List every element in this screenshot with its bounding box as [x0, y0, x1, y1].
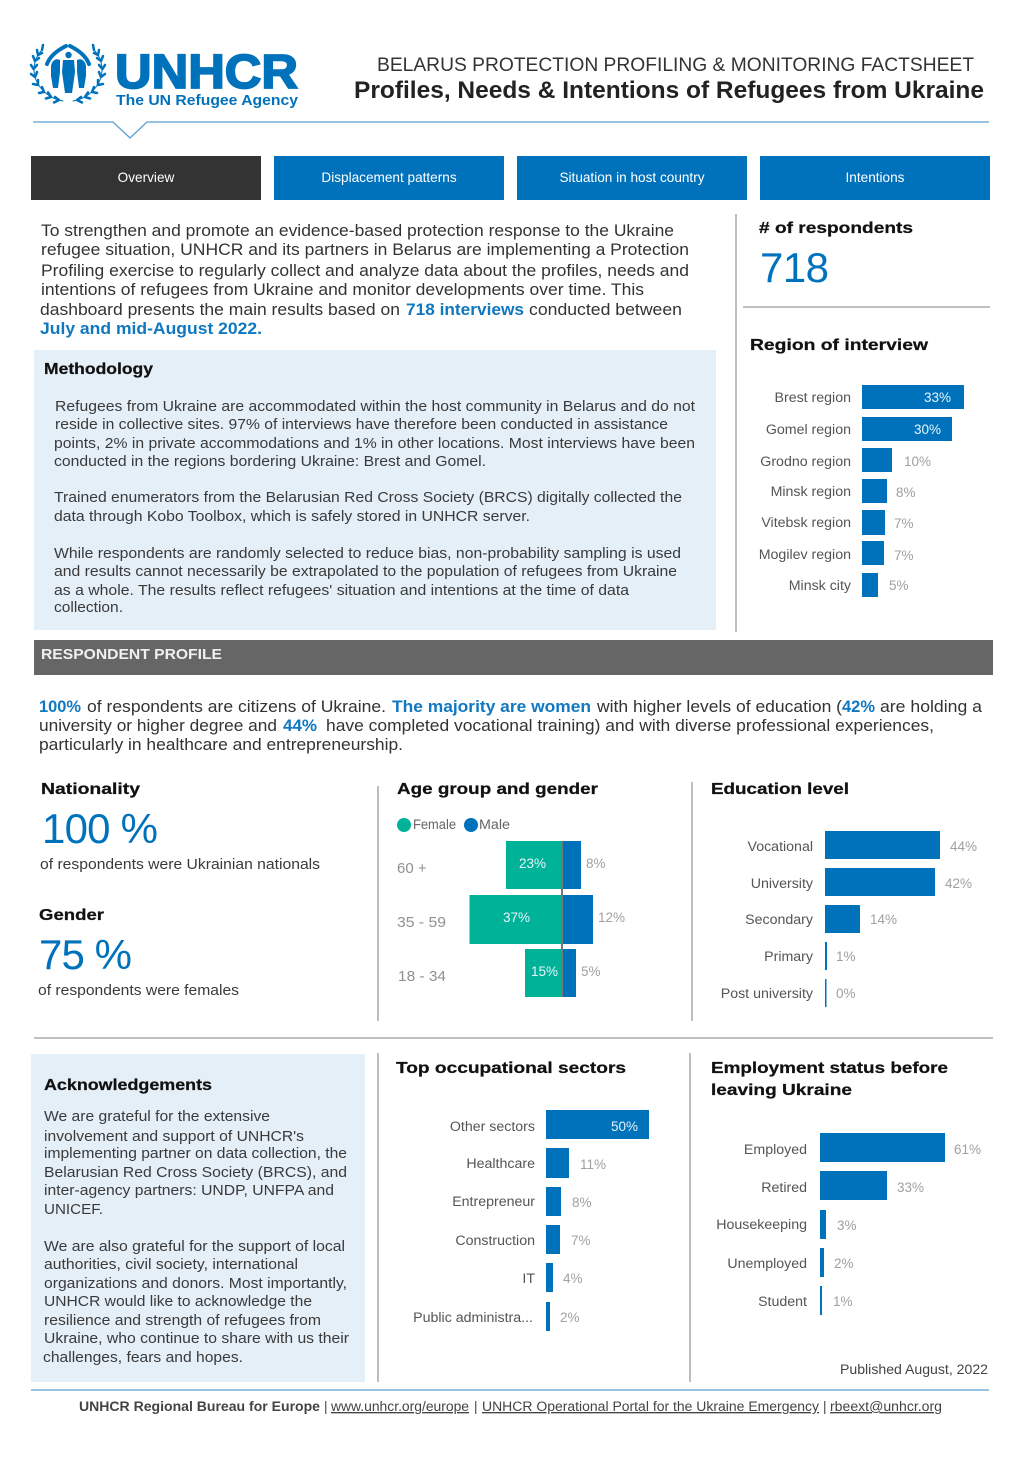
bar: Entrepreneur: Entrepreneur [452, 1194, 535, 1210]
bar: Vocational [748, 831, 977, 859]
icon: UNHCR wreath and sheltering hands [31, 45, 105, 102]
bar: Primary: Primary [764, 949, 814, 965]
row: 35 - 59: 37% [503, 910, 530, 925]
bar chart: employment status: leaving Ukraine [711, 1082, 852, 1099]
header: UNHCR logo [31, 45, 298, 109]
intro text block: intentions of refugees from Ukraine and monitor developments over time. This [41, 281, 644, 299]
bar: Minsk region [771, 479, 916, 503]
footer links: rbeext@unhcr.org [830, 1399, 942, 1414]
bar: Unemployed: 2% [834, 1256, 854, 1271]
intro text block: July and mid-August 2022. [40, 320, 262, 338]
acknowledgements text: organizations and donors. Most importantly, [44, 1275, 347, 1292]
bar: Other sectors: 50% [611, 1119, 638, 1134]
respondent profile summary text: The majority are women [392, 698, 591, 716]
stat: gender: 75 % [39, 931, 132, 978]
bar chart: employment status [711, 1060, 981, 1315]
acknowledgements text: We are grateful for the extensive [44, 1108, 270, 1125]
bar: IT: IT [522, 1271, 535, 1287]
bar: Brest region: Brest region [774, 390, 851, 406]
methodology text: and results cannot necessarily be extrapolated to the population of refugees from Ukraine [54, 563, 677, 580]
logo tagline: The UN Refugee Agency [116, 93, 298, 109]
stat: nationality [40, 781, 320, 873]
bar: University [751, 868, 972, 896]
bar: Employed [744, 1133, 981, 1162]
bar: Grodno region: Grodno region [760, 454, 851, 470]
bar: Grodno region: 10% [904, 454, 931, 469]
footer links: | [823, 1399, 827, 1414]
row: 60 + [397, 841, 606, 889]
tab: Overview [31, 156, 261, 200]
row: 18 - 34: 5% [581, 964, 601, 979]
bar: Other sectors: Other sectors [450, 1119, 535, 1135]
methodology text: While respondents are randomly selected to reduce bias, non-probability sampling is used [54, 545, 681, 562]
panel: acknowledgements [31, 1054, 365, 1382]
bar: Post university: 0% [836, 986, 856, 1001]
bar chart: education level [711, 781, 977, 1007]
tab: Displacement patterns: Displacement patterns [321, 170, 457, 185]
bar chart: education level: Education level [711, 781, 849, 798]
bar: Retired: 33% [897, 1180, 924, 1195]
footer links: | [324, 1399, 328, 1414]
row: 18 - 34 [398, 949, 601, 997]
acknowledgements text: Ukraine, who continue to share with us their [44, 1330, 349, 1347]
legend [397, 817, 510, 832]
methodology text [54, 398, 696, 616]
intro text block: Profiling exercise to regularly collect and analyze data about the profiles, needs and [41, 262, 689, 280]
bar: Primary [764, 942, 856, 970]
header rule with chevron [33, 122, 989, 138]
bar: Entrepreneur [452, 1187, 592, 1216]
navigation tabs [31, 156, 990, 200]
tab: Intentions: Intentions [846, 170, 905, 185]
methodology text: Trained enumerators from the Belarusian Red Cross Society (BRCS) digitally collected the [54, 489, 682, 506]
bar: Housekeeping: 3% [837, 1218, 857, 1233]
bar: Unemployed [727, 1248, 854, 1277]
bar: Housekeeping [716, 1210, 857, 1239]
methodology heading: Methodology [44, 361, 153, 378]
bar: Mogilev region: Mogilev region [759, 547, 851, 563]
bar: Retired [761, 1171, 924, 1200]
stat: number of respondents [759, 220, 913, 291]
intro text block: refugee situation, UNHCR and its partners in Belarus are implementing a Protection [41, 241, 689, 259]
stat: nationality: 100 % [42, 805, 158, 852]
methodology text: conducted in the regions bordering Ukraine: Brest and Gomel. [54, 453, 486, 470]
acknowledgements text: challenges, fears and hopes. [43, 1349, 243, 1366]
methodology text: Refugees from Ukraine are accommodated within the host community in Belarus and do not [55, 398, 696, 415]
acknowledgements text: implementing partner on data collection, the [44, 1145, 347, 1162]
intro text block: conducted between [529, 301, 682, 319]
footer links: UNHCR Regional Bureau for Europe [79, 1399, 320, 1414]
intro text block [40, 222, 689, 338]
bar: Construction: Construction [455, 1233, 535, 1249]
bar: Employed: 61% [954, 1142, 981, 1157]
bar: Other sectors [450, 1110, 649, 1139]
acknowledgements text: authorities, civil society, international [44, 1256, 298, 1273]
bar: Grodno region [760, 448, 931, 472]
methodology text: data through Kobo Toolbox, which is safely stored in UNHCR server. [54, 508, 530, 525]
bar chart: employment status: Employment status before [711, 1060, 948, 1077]
acknowledgements text [43, 1108, 349, 1366]
bar: Healthcare: Healthcare [466, 1156, 535, 1172]
bar: Mogilev region [759, 541, 914, 565]
bar: Gomel region [766, 417, 952, 441]
tab: Situation in host country [517, 156, 747, 200]
bar: Secondary [745, 905, 897, 933]
respondent profile summary text: have completed vocational training) and with diverse professional experiences, [326, 717, 934, 735]
subtitle: BELARUS PROTECTION PROFILING & MONITORING FACTSHEET [377, 55, 974, 76]
bar: Student: 1% [833, 1294, 853, 1309]
bar: Minsk region: 8% [896, 485, 916, 500]
section banner: respondent profile [34, 640, 993, 675]
row: 60 +: 23% [519, 856, 546, 871]
bar: Secondary: 14% [870, 912, 897, 927]
bar chart: region of interview [750, 337, 964, 597]
bar: Vitebsk region: Vitebsk region [761, 515, 851, 531]
row: 18 - 34: 18 - 34 [398, 968, 446, 985]
bar: Vocational: Vocational [748, 839, 813, 855]
chart: age group and gender [397, 781, 625, 997]
intro text block: To strengthen and promote an evidence-based protection response to the Ukraine [41, 222, 674, 240]
bar: Secondary: Secondary [745, 912, 814, 928]
bar: Public administration [413, 1302, 580, 1331]
bar chart: top occupational sectors: Top occupational sectors [396, 1060, 626, 1077]
bar: University: University [751, 876, 814, 892]
bar: Employed: Employed [744, 1142, 807, 1158]
bar: IT: 4% [563, 1271, 583, 1286]
respondent profile summary text: of respondents are citizens of Ukraine. [87, 698, 386, 716]
footer links: www.unhcr.org/europe [330, 1399, 469, 1414]
row: 35 - 59 [397, 895, 625, 944]
stat: number of respondents: 718 [760, 244, 829, 291]
bar: Gomel region: 30% [914, 422, 941, 437]
bar: Student [758, 1286, 853, 1315]
acknowledgements text: UNICEF. [44, 1201, 103, 1218]
methodology text: collection. [54, 599, 123, 616]
stat: nationality: of respondents were Ukrainian nationals [40, 856, 320, 873]
acknowledgements text: resilience and strength of refugees from [44, 1312, 321, 1329]
bar: Housekeeping: Housekeeping [716, 1217, 807, 1233]
acknowledgements text: involvement and support of UNHCR's [44, 1128, 304, 1145]
bar: Brest region: 33% [924, 390, 951, 405]
acknowledgements text: We are also grateful for the support of local [44, 1238, 345, 1255]
bar: Unemployed: Unemployed [727, 1256, 807, 1272]
methodology text: reside in collective sites. 97% of interviews have therefore been conducted in assistance [55, 416, 668, 433]
panel: methodology [34, 350, 716, 630]
acknowledgements heading: Acknowledgements [44, 1077, 212, 1094]
respondent profile summary text: 44% [283, 717, 317, 735]
respondent profile summary text: with higher levels of education ( [596, 698, 843, 716]
row: 60 +: 8% [586, 856, 606, 871]
bar: Vocational: 44% [950, 839, 977, 854]
footer links [79, 1399, 942, 1414]
stat: number of respondents: # of respondents [759, 220, 913, 237]
respondent profile summary text: 100% [39, 698, 81, 716]
respondent profile summary text [39, 698, 983, 754]
respondent profile summary text: are holding a [880, 698, 983, 716]
acknowledgements text: inter-agency partners: UNDP, UNFPA and [44, 1182, 334, 1199]
row: 35 - 59: 35 - 59 [397, 914, 446, 931]
section banner: respondent profile: RESPONDENT PROFILE [41, 646, 222, 663]
bar: Construction [455, 1225, 591, 1254]
row: 35 - 59: 12% [598, 910, 625, 925]
bar: Mogilev region: 7% [894, 548, 914, 563]
methodology text: as a whole. The results reflect refugees' situation and intentions at the time of data [54, 582, 630, 599]
respondent profile summary text: university or higher degree and [39, 717, 277, 735]
bar: Brest region [774, 385, 964, 409]
intro text block: dashboard presents the main results based on [40, 301, 400, 319]
bar: Minsk city: 5% [889, 578, 909, 593]
bar: Gomel region: Gomel region [766, 422, 851, 438]
bar: Construction: 7% [571, 1233, 591, 1248]
bar: Minsk region: Minsk region [771, 484, 851, 500]
bar: Post university [721, 979, 856, 1007]
footer links: UNHCR Operational Portal for the Ukraine Emergency [482, 1399, 819, 1414]
stat: gender [38, 907, 239, 999]
bar: Minsk city [789, 573, 909, 597]
bar: Vitebsk region [761, 510, 914, 535]
bar: University: 42% [945, 876, 972, 891]
bar: Public administration: Public administra... [413, 1310, 533, 1326]
legend: Female [413, 817, 456, 832]
bar: Healthcare: 11% [580, 1157, 606, 1172]
bar: Healthcare [466, 1148, 606, 1178]
acknowledgements text: Belarusian Red Cross Society (BRCS), and [44, 1164, 347, 1181]
intro text block: 718 interviews [406, 301, 524, 319]
legend: Male [479, 817, 510, 832]
bar: IT [522, 1263, 583, 1292]
row: 18 - 34: 15% [531, 964, 558, 979]
tab: Displacement patterns [274, 156, 504, 200]
bar chart: top occupational sectors [396, 1060, 649, 1331]
methodology text: points, 2% in private accommodations and 1% in other locations. Most interviews have been [54, 435, 695, 452]
stat: gender: Gender [39, 907, 104, 924]
bar: Entrepreneur: 8% [572, 1195, 592, 1210]
tab: Overview: Overview [118, 170, 175, 185]
bar: Post university: Post university [721, 986, 814, 1002]
respondent profile summary text: particularly in healthcare and entrepreneurship. [39, 736, 403, 754]
respondent profile summary text: 42% [842, 698, 875, 716]
tab: Intentions [760, 156, 990, 200]
bar: Retired: Retired [761, 1180, 807, 1196]
row: 60 +: 60 + [397, 860, 427, 877]
acknowledgements text: UNHCR would like to acknowledge the [44, 1293, 312, 1310]
bar: Primary: 1% [836, 949, 856, 964]
stat: gender: of respondents were females [38, 982, 239, 999]
footer links: | [474, 1399, 478, 1414]
publication date: Published August, 2022 [840, 1361, 988, 1377]
bar: Public administration: 2% [560, 1310, 580, 1325]
title block [354, 55, 984, 104]
stat: nationality: Nationality [41, 781, 140, 798]
title: Profiles, Needs & Intentions of Refugees from Ukraine [354, 77, 984, 104]
bar: Student: Student [758, 1294, 807, 1310]
bar: Minsk city: Minsk city [789, 578, 852, 594]
tab: Situation in host country: Situation in host country [559, 170, 705, 185]
logo wordmark: UNHCR [115, 46, 298, 99]
chart: age group and gender: Age group and gender [397, 781, 598, 798]
bar: Vitebsk region: 7% [894, 516, 914, 531]
bar chart: region of interview: Region of interview [750, 337, 929, 354]
